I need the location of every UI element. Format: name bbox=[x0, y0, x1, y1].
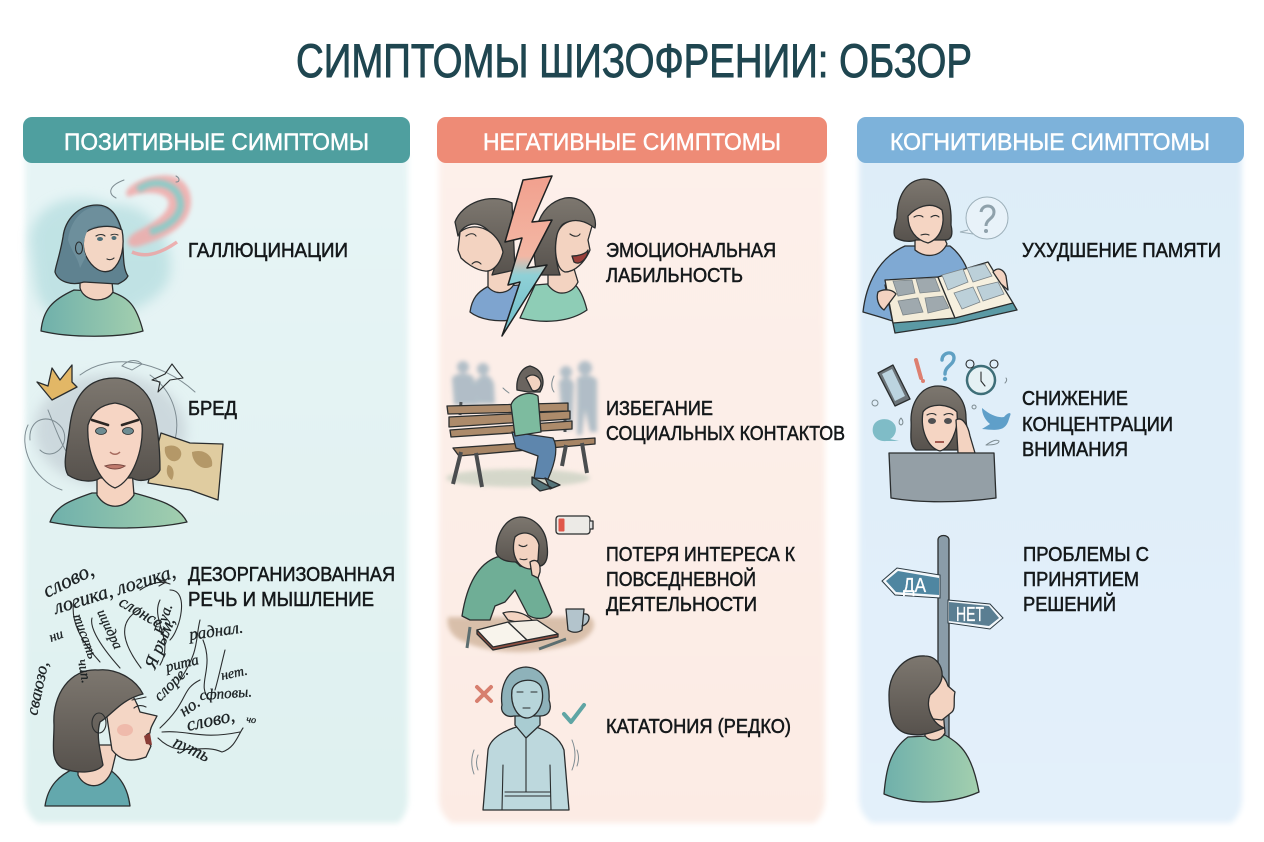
label: avoiding social contact: ИЗБЕГАНИЕ bbox=[606, 397, 713, 420]
header: negative symptoms: НЕГАТИВНЫЕ СИМПТОМЫ bbox=[483, 129, 781, 156]
label: avoiding social contact bbox=[606, 397, 845, 445]
illustration: delusions bbox=[25, 360, 223, 528]
title: СИМПТОМЫ ШИЗОФРЕНИИ: ОБЗОР bbox=[296, 34, 972, 87]
label: concentration: КОНЦЕНТРАЦИИ bbox=[1022, 413, 1173, 436]
icon: crown bbox=[37, 365, 77, 400]
label: loss of interest bbox=[606, 543, 795, 616]
icon: exclamation mark bbox=[916, 360, 921, 378]
sign: yes bbox=[882, 568, 940, 598]
panel background: negative bbox=[439, 155, 825, 823]
header: cognitive symptoms bbox=[857, 117, 1244, 163]
sign: no: НЕТ bbox=[956, 604, 984, 626]
handwritten word cloud: чип. bbox=[74, 658, 93, 685]
handwritten word cloud: раднал. bbox=[187, 618, 244, 644]
label: concentration: СНИЖЕНИЕ bbox=[1022, 387, 1128, 410]
illustration: catatonia bbox=[472, 667, 584, 810]
handwritten word cloud: слово, bbox=[185, 705, 237, 736]
illustration: loss of interest bbox=[448, 516, 594, 652]
handwritten word cloud: но. bbox=[175, 693, 204, 720]
icon: question mark bbox=[942, 353, 954, 374]
handwritten word cloud: логика, логика, bbox=[50, 561, 178, 619]
label: emotional lability bbox=[606, 239, 776, 287]
label: loss of interest: ДЕЯТЕЛЬНОСТИ bbox=[606, 593, 757, 616]
icon: lightning bolt bbox=[502, 176, 552, 336]
handwritten word cloud: Е уа. bbox=[151, 602, 176, 637]
icon: thought bubble with question bbox=[960, 197, 1008, 239]
label: decision making: РЕШЕНИЙ bbox=[1023, 592, 1116, 616]
icon: photo album bbox=[877, 262, 1017, 333]
handwritten word cloud: сфповы. bbox=[199, 684, 253, 704]
header: positive symptoms: ПОЗИТИВНЫЕ СИМПТОМЫ bbox=[64, 129, 369, 156]
handwritten word cloud: ицидра bbox=[93, 607, 125, 652]
illustration: emotional lability bbox=[455, 176, 595, 336]
label: loss of interest: ПОВСЕДНЕВНОЙ bbox=[606, 567, 756, 591]
handwritten word cloud: путь bbox=[170, 731, 213, 766]
illustration: avoiding social contact bbox=[446, 361, 597, 491]
icon: treasure map bbox=[148, 433, 223, 500]
label: decision making: ПРИНЯТИЕМ bbox=[1023, 568, 1139, 591]
panel: cognitive symptoms bbox=[857, 117, 1244, 823]
panel: positive symptoms bbox=[22, 117, 410, 823]
illustration: concentration bbox=[872, 353, 1011, 502]
header: positive symptoms bbox=[23, 117, 410, 163]
label: memory: УХУДШЕНИЕ ПАМЯТИ bbox=[1022, 239, 1221, 262]
icon: smartphone bbox=[878, 365, 910, 406]
icon: coffee cup bbox=[566, 609, 589, 632]
label: decision making: ПРОБЛЕМЫ С bbox=[1023, 543, 1149, 566]
label: disorganized speech: РЕЧЬ И МЫШЛЕНИЕ bbox=[188, 588, 374, 611]
label: hallucinations: ГАЛЛЮЦИНАЦИИ bbox=[188, 239, 348, 262]
icon: open book bbox=[477, 620, 558, 650]
icon: bird bbox=[982, 408, 1011, 430]
handwritten word cloud bbox=[22, 557, 257, 766]
label: disorganized speech bbox=[188, 563, 395, 611]
illustration: disorganized speech bbox=[22, 557, 257, 806]
icon: low battery bbox=[556, 516, 593, 534]
label: emotional lability: ЭМОЦИОНАЛЬНАЯ bbox=[606, 239, 776, 262]
handwritten word cloud: ни bbox=[47, 627, 65, 646]
handwritten word cloud: сваюзо, bbox=[22, 660, 52, 717]
panel: negative symptoms bbox=[437, 117, 845, 823]
icon: chat bubble bbox=[873, 419, 899, 441]
label: loss of interest: ПОТЕРЯ ИНТЕРЕСА К bbox=[606, 543, 795, 566]
icon: teal check bbox=[564, 705, 584, 722]
label: concentration bbox=[1022, 387, 1173, 461]
handwritten word cloud: чо bbox=[246, 714, 257, 726]
sign: yes: ДА bbox=[903, 575, 927, 597]
label: avoiding social contact: СОЦИАЛЬНЫХ КОНТАКТОВ bbox=[606, 422, 845, 445]
panel background: positive bbox=[25, 155, 408, 823]
label: disorganized speech: ДЕЗОРГАНИЗОВАННАЯ bbox=[188, 563, 395, 586]
header: cognitive symptoms: КОГНИТИВНЫЕ СИМПТОМЫ bbox=[890, 129, 1210, 156]
label: concentration: ВНИМАНИЯ bbox=[1022, 438, 1128, 461]
label: catatonia: КАТАТОНИЯ (РЕДКО) bbox=[606, 715, 791, 738]
illustration: memory bbox=[863, 179, 1017, 333]
sign: no bbox=[948, 600, 1003, 629]
handwritten word cloud: тисать bbox=[69, 612, 99, 661]
illustration: decision making bbox=[882, 536, 1003, 802]
label: emotional lability: ЛАБИЛЬНОСТЬ bbox=[606, 264, 743, 287]
header: negative symptoms bbox=[437, 117, 827, 163]
icon: alarm clock bbox=[966, 360, 998, 394]
illustration: hallucinations bbox=[30, 175, 191, 336]
handwritten word cloud: нет. bbox=[220, 664, 249, 684]
signpost pole bbox=[938, 536, 949, 740]
handwritten word cloud: слонсе bbox=[116, 592, 167, 632]
icon: red cross bbox=[477, 687, 491, 701]
label: decision making bbox=[1023, 543, 1149, 616]
handwritten word cloud: рита bbox=[163, 652, 200, 676]
handwritten word cloud: Я рым, bbox=[140, 614, 179, 672]
panel background: cognitive bbox=[859, 155, 1242, 823]
icon: laptop bbox=[889, 453, 996, 502]
handwritten word cloud: слоре. bbox=[151, 664, 192, 705]
label: delusions: БРЕД bbox=[188, 397, 237, 420]
handwritten word cloud: слово, bbox=[39, 557, 98, 602]
